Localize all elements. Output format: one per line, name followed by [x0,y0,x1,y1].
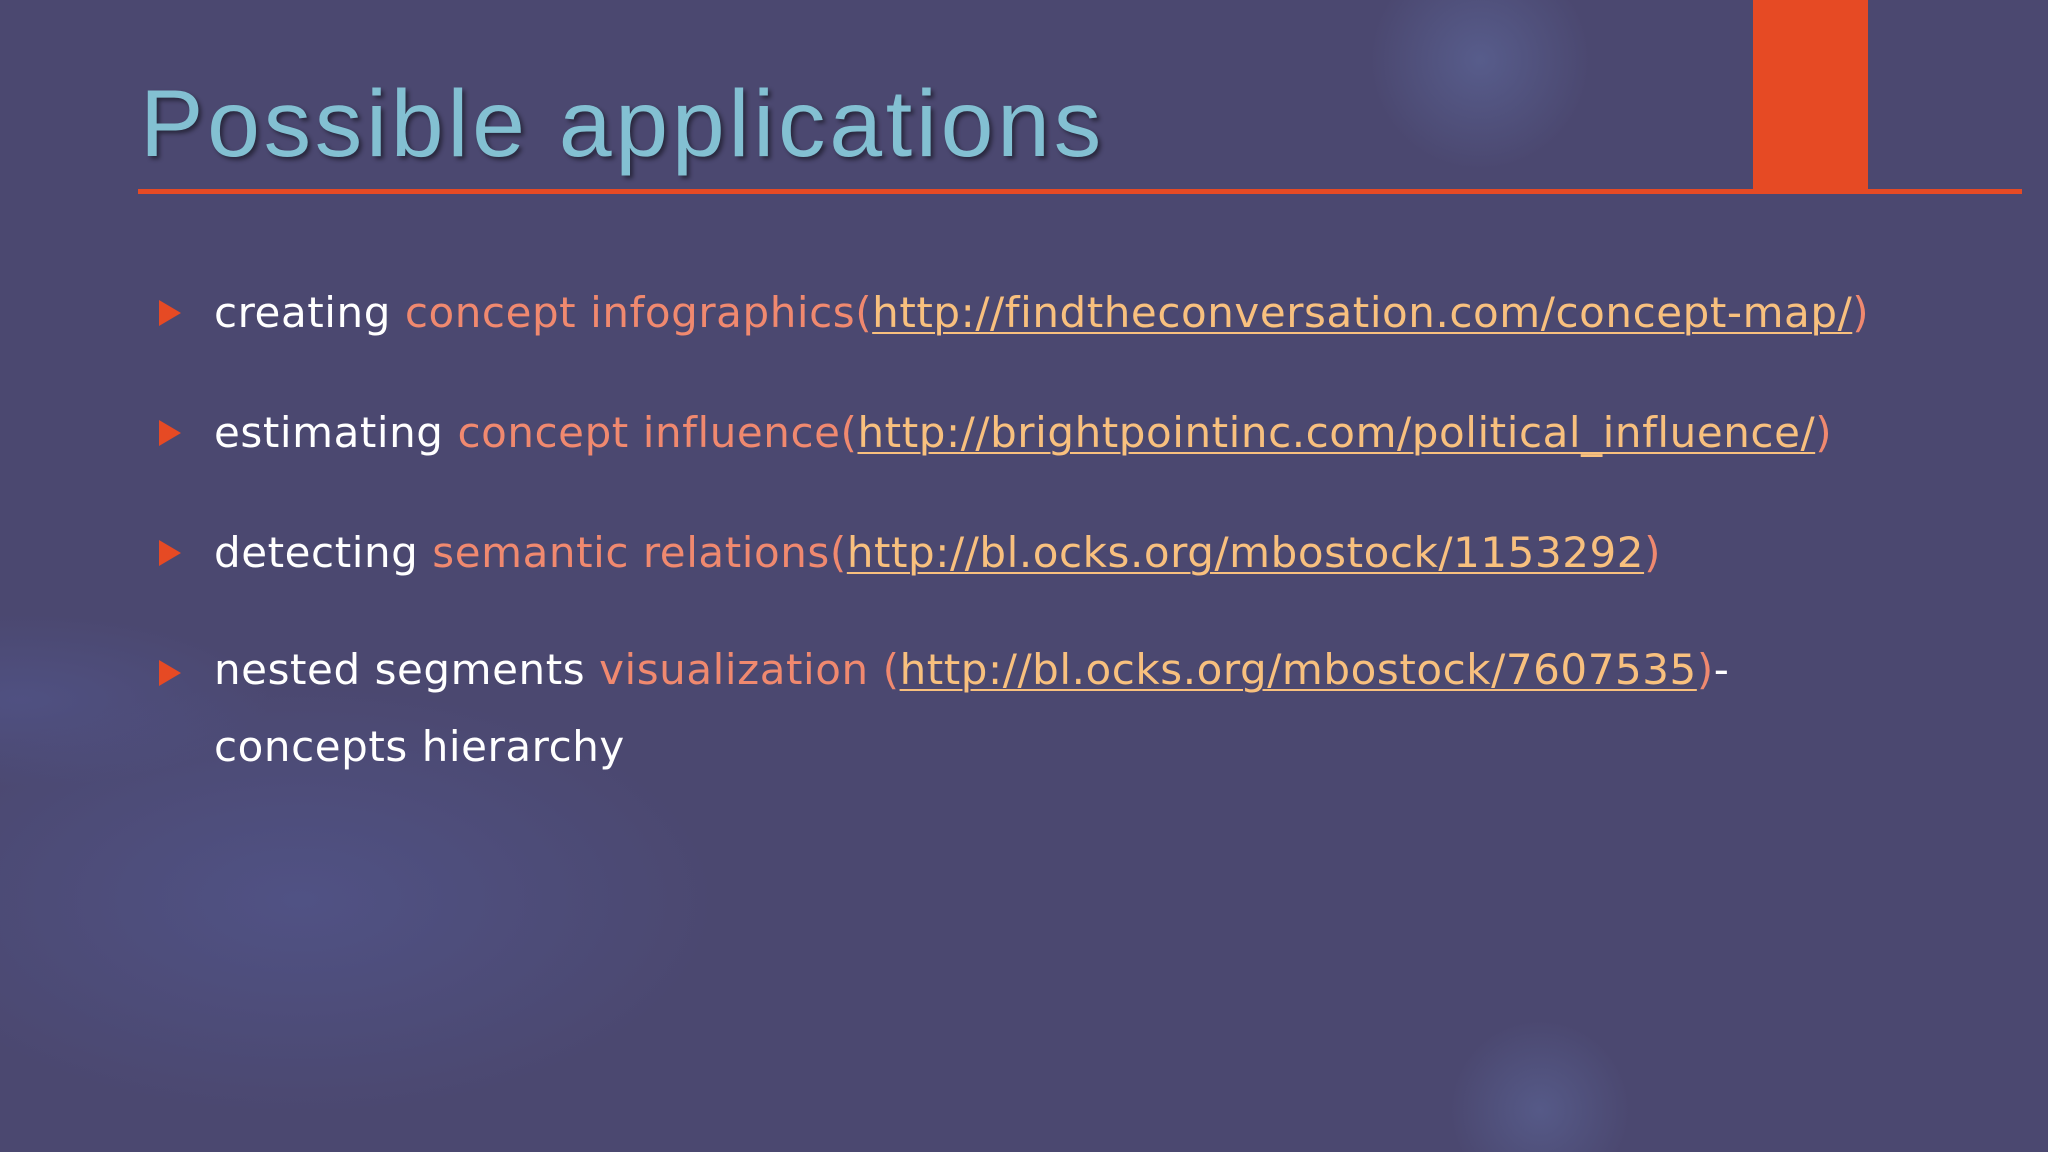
bullet 4 [214,645,1730,771]
bullet 2: estimating concept influence(http://brightpointinc.com/political_influence/) [214,408,1832,457]
title: Possible applications [140,71,1105,177]
icon: bullet 2 [159,420,181,446]
icon: bullet 1 [159,300,181,326]
accent rectangle [1753,0,1868,191]
bullet 1: creating concept infographics(http://findtheconversation.com/concept-map/) [214,288,1869,337]
bullet 4: concepts hierarchy [214,722,625,771]
bullet 4: nested segments visualization (http://bl.ocks.org/mbostock/7607535)- [214,645,1730,694]
bullet 3: detecting semantic relations(http://bl.ocks.org/mbostock/1153292) [214,528,1661,577]
icon: bullet 3 [159,540,181,566]
icon: bullet 4 [159,660,181,686]
